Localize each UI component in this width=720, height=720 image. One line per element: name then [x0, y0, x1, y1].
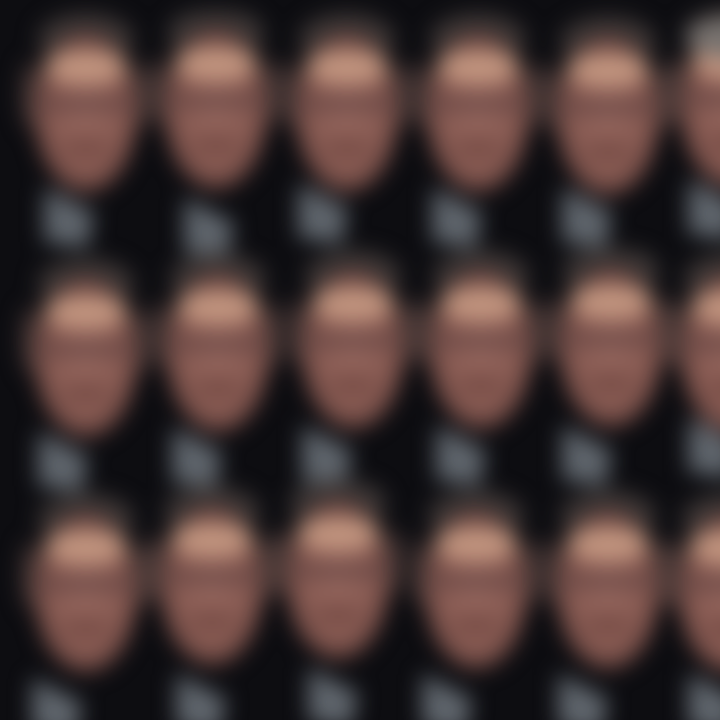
- face row 3 column 2: [148, 486, 276, 666]
- row 3 shirt collars: [32, 668, 720, 720]
- row 2 faces: [22, 248, 720, 438]
- face row 1 column 5: [544, 16, 672, 196]
- face row 2 column 1: [22, 258, 150, 438]
- face row 2 column 2: [154, 253, 282, 433]
- row 2 shirt collars: [38, 418, 720, 492]
- face row 2 column 6: [668, 253, 720, 433]
- face row 3 column 3: [274, 480, 402, 660]
- face row 3 column 1: [22, 493, 150, 673]
- face row 3 column 4: [412, 490, 540, 670]
- face row 1 column 2: [152, 10, 280, 190]
- face row 2 column 3: [289, 250, 417, 430]
- face row 1 column 3: [283, 13, 411, 193]
- row 1 shirt collars: [44, 180, 720, 258]
- face row 1 column 4: [414, 13, 542, 193]
- face row 3 column 6: [666, 493, 720, 673]
- face row 3 column 5: [544, 490, 672, 670]
- face row 1 column 6: [668, 8, 720, 188]
- row 1 faces: [22, 8, 720, 196]
- face row 2 column 4: [417, 250, 545, 430]
- face row 2 column 5: [547, 248, 675, 428]
- row 3 faces: [22, 480, 720, 673]
- face row 1 column 1: [22, 13, 150, 193]
